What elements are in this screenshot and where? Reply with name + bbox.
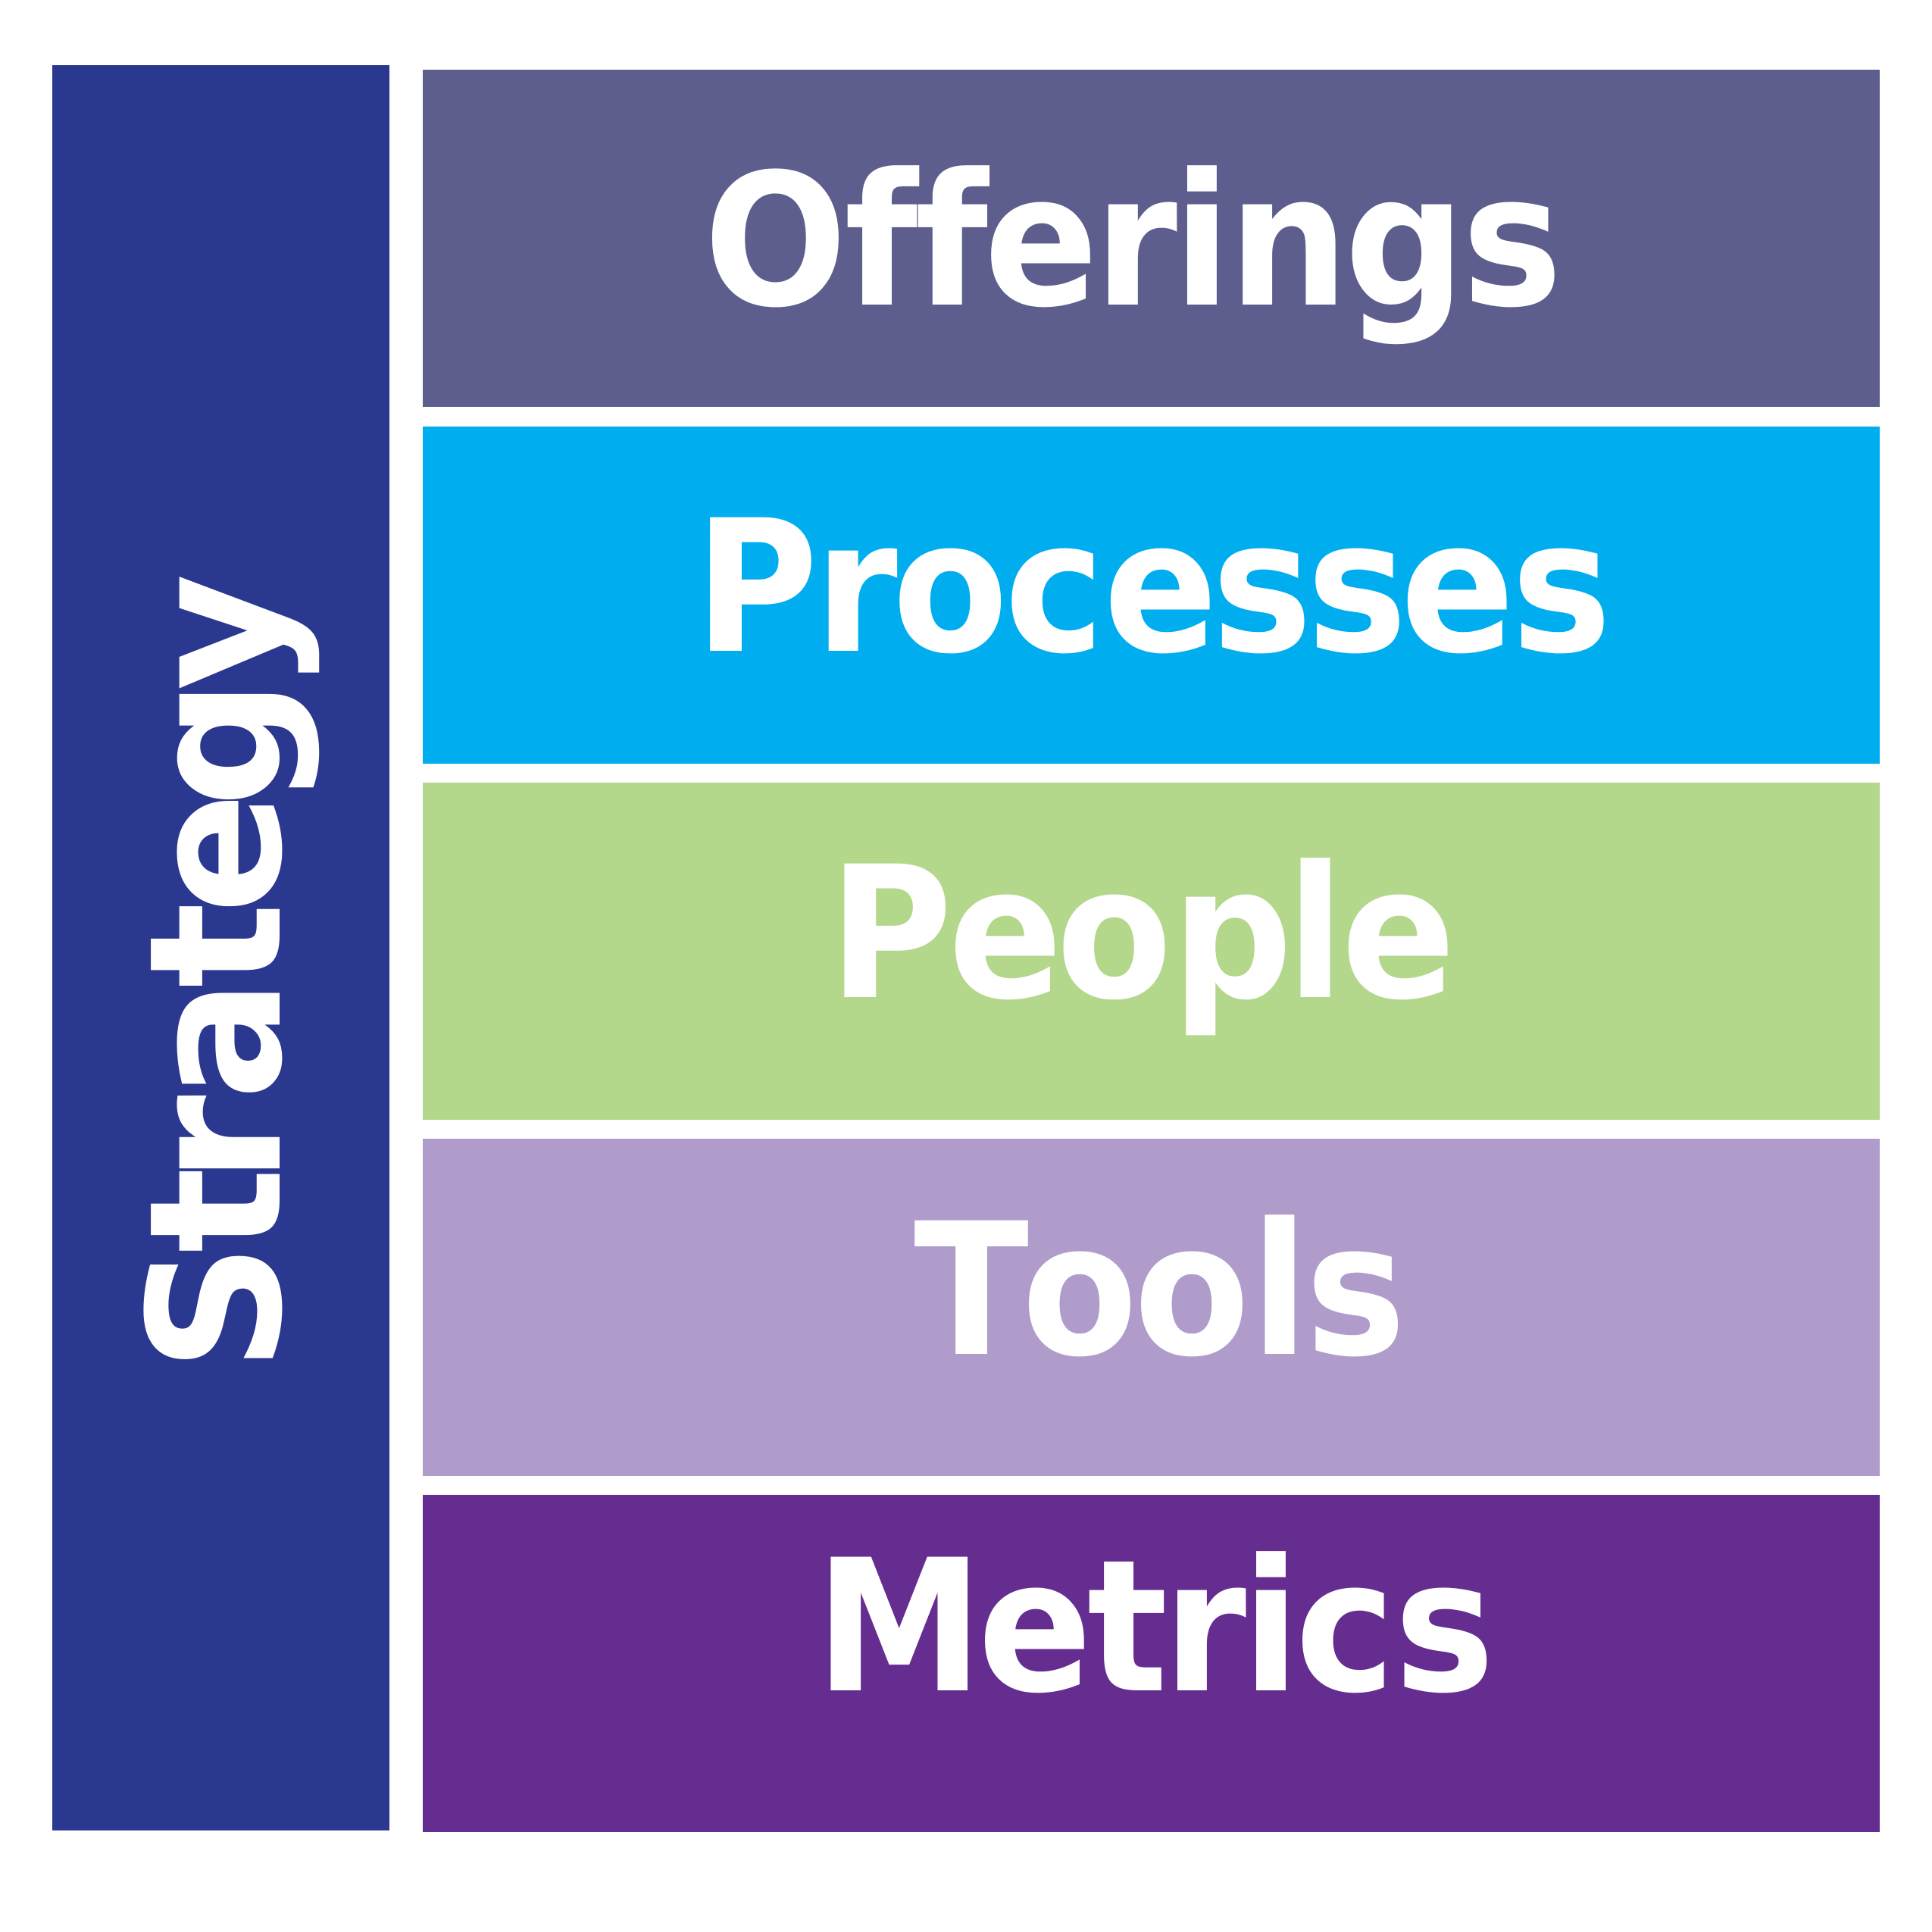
panel: strategy bbox=[52, 65, 389, 1830]
label: Strategy: Strategy bbox=[110, 574, 324, 1372]
label: Tools: Tools bbox=[914, 1183, 1406, 1397]
panel: people bbox=[423, 783, 1880, 1120]
label: Offerings: Offerings bbox=[704, 134, 1562, 348]
label: Processes: Processes bbox=[695, 480, 1612, 694]
panel: offerings bbox=[423, 70, 1880, 407]
label: People: People bbox=[829, 827, 1455, 1040]
panel: processes bbox=[423, 427, 1880, 764]
panel: metrics bbox=[423, 1495, 1880, 1832]
panel: tools bbox=[423, 1139, 1880, 1476]
label: Metrics: Metrics bbox=[815, 1520, 1495, 1733]
